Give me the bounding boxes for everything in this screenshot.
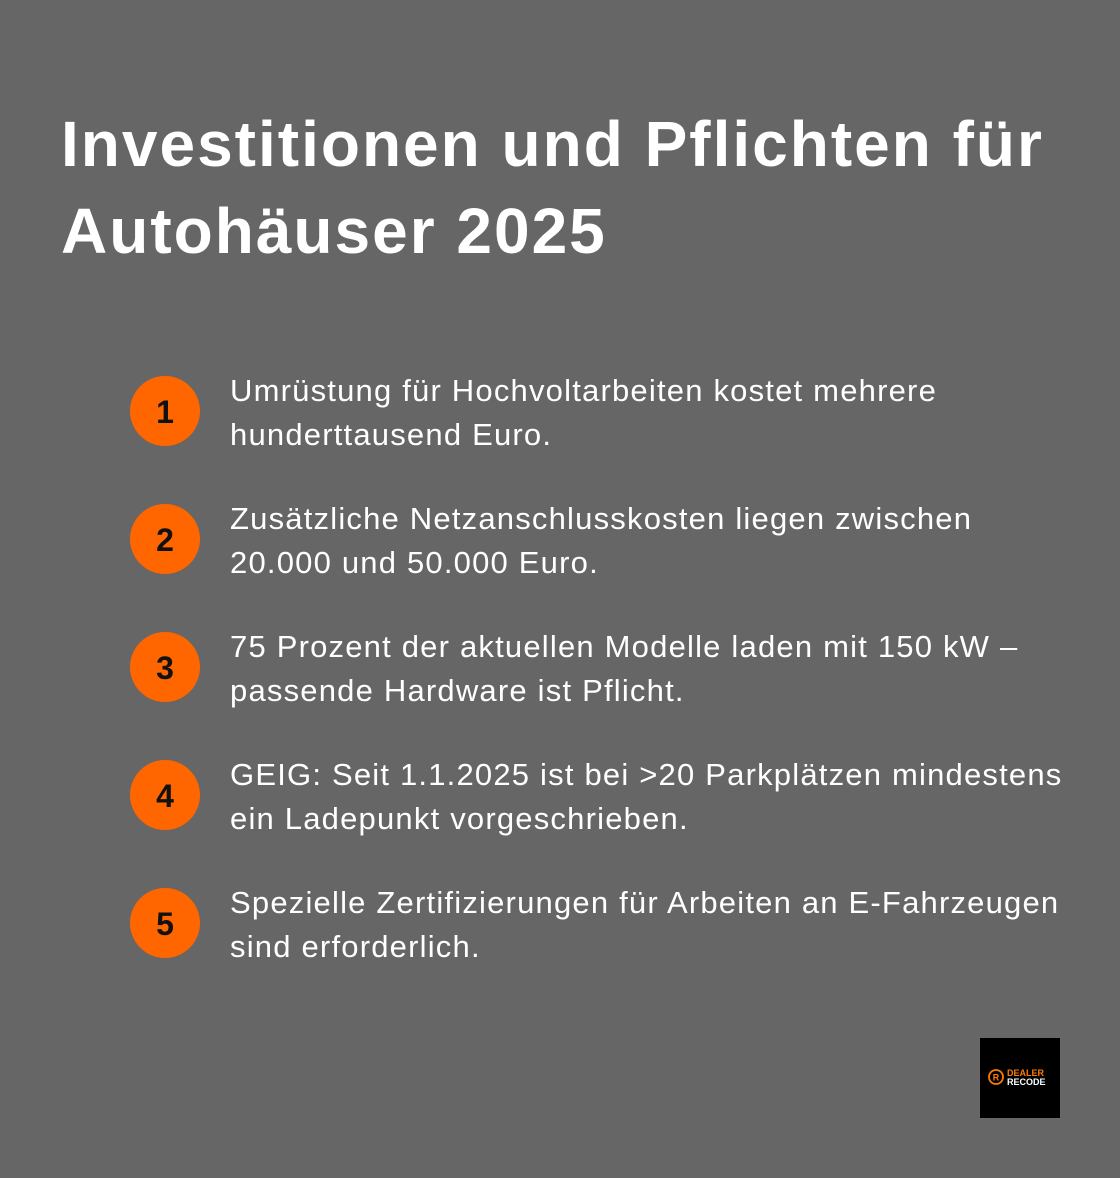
number 3: 3 (156, 650, 174, 686)
text 1 (230, 373, 937, 452)
item 5 (130, 885, 1059, 964)
logo: DEALER (1007, 1068, 1045, 1078)
item 3 (130, 629, 1018, 708)
number 1: 1 (156, 394, 174, 430)
logo: R (993, 1072, 1000, 1082)
title: Investitionen und Pflichten für (61, 108, 1044, 180)
number 4 (130, 760, 200, 830)
number 5 (130, 888, 200, 958)
text 1: Umrüstung für Hochvoltarbeiten kostet mehrere (230, 373, 937, 408)
text 2: Zusätzliche Netzanschlusskosten liegen zwischen (230, 501, 972, 536)
text 3: 75 Prozent der aktuellen Modelle laden mit 150 kW – (230, 629, 1018, 664)
text 5: Spezielle Zertifizierungen für Arbeiten an E-Fahrzeugen (230, 885, 1059, 920)
number 2: 2 (156, 522, 174, 558)
number 2 (130, 504, 200, 574)
number 5: 5 (156, 906, 174, 942)
number 4: 4 (156, 778, 174, 814)
number 1 (130, 376, 200, 446)
title (61, 108, 1044, 267)
item 2 (130, 501, 972, 580)
text 3: passende Hardware ist Pflicht. (230, 673, 685, 708)
text 3 (230, 629, 1018, 708)
text 5: sind erforderlich. (230, 929, 481, 964)
item 4 (130, 757, 1062, 836)
text 2: 20.000 und 50.000 Euro. (230, 545, 599, 580)
logo: RECODE (1007, 1077, 1046, 1087)
text 4: GEIG: Seit 1.1.2025 ist bei >20 Parkplätzen mindestens (230, 757, 1062, 792)
text 4: ein Ladepunkt vorgeschrieben. (230, 801, 689, 836)
item 1 (130, 373, 937, 452)
text 4 (230, 757, 1062, 836)
number 3 (130, 632, 200, 702)
text 2 (230, 501, 972, 580)
logo (980, 1038, 1060, 1118)
text 1: hunderttausend Euro. (230, 417, 552, 452)
title: Autohäuser 2025 (61, 195, 607, 267)
text 5 (230, 885, 1059, 964)
